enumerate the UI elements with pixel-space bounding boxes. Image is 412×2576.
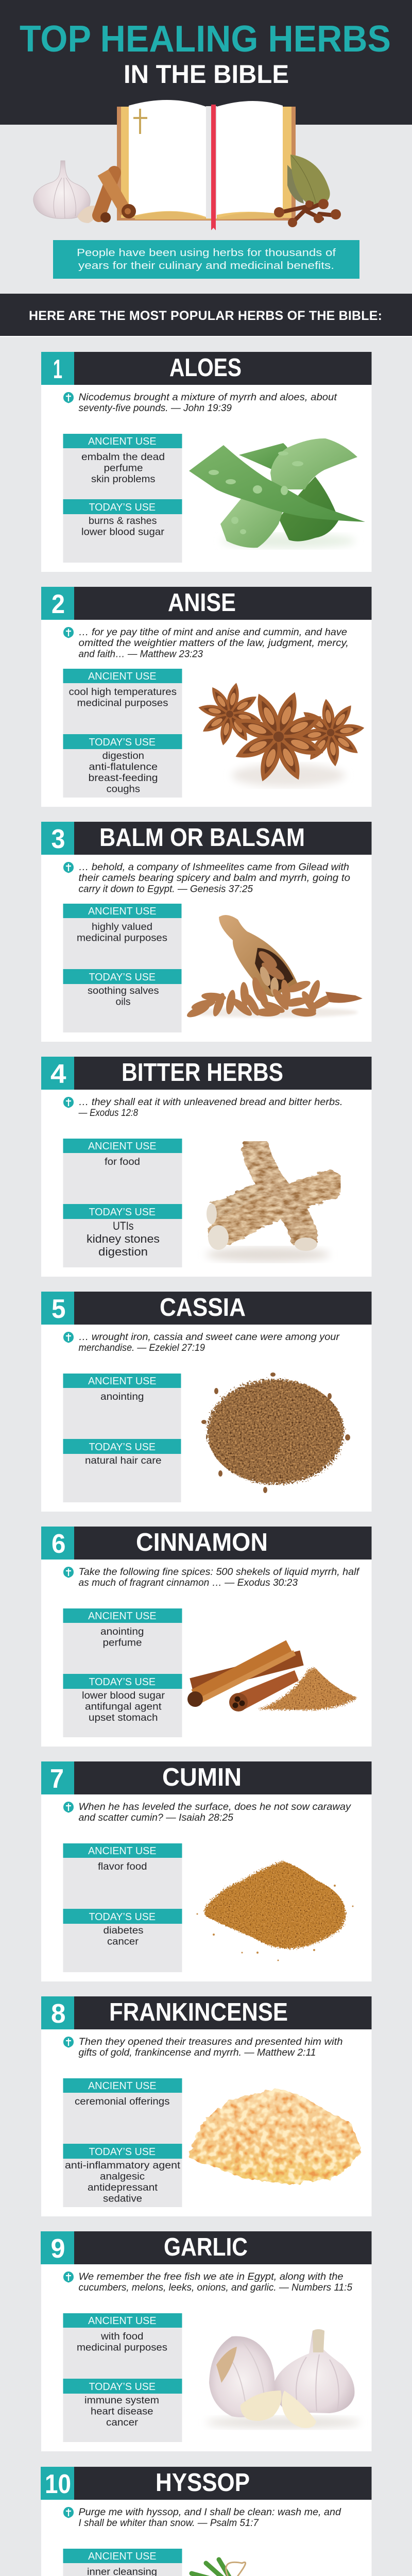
panel: 3 balm or balsam bbox=[41, 822, 372, 1042]
ancient use: ANCIENT USE bbox=[88, 2080, 157, 2092]
bible quote: Purge me with hyssop, and I shall be clean: wash me, and bbox=[78, 2507, 341, 2518]
ancient use bbox=[63, 1139, 182, 1204]
today's use bbox=[63, 969, 181, 1032]
panel: 9 garlic bbox=[41, 2231, 372, 2451]
illustration: open bible bbox=[117, 100, 296, 230]
subtitle: IN THE BIBLE bbox=[124, 60, 289, 89]
heading: BALM OR BALSAM bbox=[99, 824, 305, 852]
today's use: anti-flatulence bbox=[89, 761, 158, 773]
heading: HYSSOP bbox=[156, 2469, 250, 2497]
today's use: diabetes bbox=[103, 1925, 143, 1936]
heading: CUMIN bbox=[162, 1764, 242, 1791]
number: 6 bbox=[52, 1529, 66, 1559]
ancient use: medicinal purposes bbox=[77, 933, 167, 944]
ancient use: perfume bbox=[104, 463, 143, 474]
bible quote bbox=[78, 1802, 352, 1823]
today's use bbox=[63, 2379, 182, 2442]
number: 10 bbox=[45, 2469, 71, 2499]
ancient use: ANCIENT USE bbox=[88, 436, 157, 447]
panel: 1 aloes bbox=[41, 352, 372, 572]
heading: ALOES bbox=[169, 354, 242, 382]
illustration: bay leaves bbox=[287, 155, 330, 207]
bible quote bbox=[78, 1567, 360, 1588]
today's use bbox=[63, 499, 182, 563]
ancient use: anointing bbox=[100, 1626, 144, 1637]
ancient use: ANCIENT USE bbox=[88, 1611, 157, 1622]
ancient use: for food bbox=[105, 1157, 140, 1167]
bible quote bbox=[78, 627, 349, 659]
heading: GARLIC bbox=[164, 2233, 248, 2261]
bible quote: Take the following fine spices: 500 shekels of liquid myrrh, half bbox=[78, 1567, 360, 1578]
today's use: soothing salves bbox=[88, 986, 159, 996]
bible quote: Nicodemus brought a mixture of myrrh and aloes, about bbox=[78, 392, 337, 403]
bible quote: seventy-five pounds. — John 19:39 bbox=[78, 403, 232, 414]
ancient use bbox=[63, 434, 182, 499]
bible quote: carry it down to Egypt. — Genesis 37:25 bbox=[78, 884, 253, 894]
icon: cross bbox=[63, 1802, 74, 1812]
number: 7 bbox=[50, 1764, 64, 1794]
today's use: antidepressant bbox=[88, 2182, 158, 2193]
ancient use: ANCIENT USE bbox=[88, 2315, 157, 2327]
today's use: cancer bbox=[107, 1936, 139, 1947]
panel: 5 cassia bbox=[41, 1292, 372, 1512]
panel: 10 hyssop bbox=[41, 2467, 372, 2576]
ancient use: cool high temperatures bbox=[69, 687, 177, 698]
panel: 7 cumin bbox=[41, 1761, 372, 1981]
icon: cross bbox=[63, 2272, 74, 2282]
ancient use: ANCIENT USE bbox=[88, 2551, 157, 2562]
bible quote: — Exodus 12:8 bbox=[78, 1108, 138, 1118]
ancient use bbox=[63, 1843, 182, 1909]
today's use: kidney stones bbox=[87, 1232, 160, 1245]
image: star anise bbox=[192, 676, 369, 798]
illustration: garlic bulb bbox=[33, 161, 98, 223]
ancient use: perfume bbox=[103, 1637, 142, 1649]
today's use: TODAY’S USE bbox=[89, 972, 156, 983]
ancient use bbox=[63, 2313, 182, 2379]
today's use bbox=[63, 1674, 182, 1737]
bible quote: … they shall eat it with unleavened bread and bitter herbs. bbox=[78, 1097, 343, 1108]
today's use: oils bbox=[115, 996, 131, 1008]
today's use: TODAY’S USE bbox=[89, 737, 156, 748]
bible quote bbox=[78, 2037, 343, 2058]
image: cinnamon sticks and powder bbox=[187, 1647, 357, 1711]
ancient use: with food bbox=[100, 2331, 143, 2342]
panel: 6 cinnamon bbox=[41, 1527, 372, 1747]
heading: BITTER HERBS bbox=[122, 1059, 283, 1087]
intro callout bbox=[53, 240, 359, 279]
heading: ANISE bbox=[168, 589, 236, 617]
image: frankincense resin bbox=[190, 2089, 362, 2184]
ancient use: ANCIENT USE bbox=[88, 1376, 157, 1387]
today's use: lower blood sugar bbox=[81, 527, 165, 538]
bible quote bbox=[78, 392, 337, 414]
number: 2 bbox=[52, 589, 65, 619]
illustration: cinnamon sticks bbox=[99, 173, 136, 223]
icon: cross bbox=[63, 862, 74, 873]
today's use: breast-feeding bbox=[89, 773, 158, 784]
bible quote bbox=[78, 2507, 341, 2529]
number: 5 bbox=[52, 1294, 66, 1324]
panel: 4 bitter herbs bbox=[41, 1057, 372, 1277]
today's use: immune system bbox=[84, 2395, 159, 2406]
bible quote: and faith… — Matthew 23:23 bbox=[78, 649, 203, 659]
bible quote: cucumbers, melons, leeks, onions, and garlic. — Numbers 11:5 bbox=[78, 2282, 352, 2293]
today's use: upset stomach bbox=[89, 1713, 158, 1723]
ancient use: ANCIENT USE bbox=[88, 671, 157, 682]
today's use: UTIs bbox=[113, 1219, 134, 1232]
today's use: TODAY’S USE bbox=[89, 1676, 156, 1688]
section heading band bbox=[0, 294, 412, 337]
bible quote: … behold, a company of Ishmeelites came from Gilead with bbox=[78, 862, 349, 873]
ancient use: ANCIENT USE bbox=[88, 1845, 157, 1857]
today's use bbox=[63, 1439, 181, 1502]
ancient use: ceremonial offerings bbox=[75, 2096, 170, 2107]
ancient use: medicinal purposes bbox=[77, 2342, 167, 2353]
number: 9 bbox=[50, 2234, 65, 2264]
image: hyssop bundle bbox=[183, 2560, 363, 2576]
today's use: analgesic bbox=[100, 2171, 145, 2182]
bible quote: When he has leveled the surface, does he not sow caraway bbox=[78, 1802, 352, 1812]
today's use: sedative bbox=[103, 2194, 142, 2204]
ancient use: highly valued bbox=[92, 922, 152, 933]
heading: CINNAMON bbox=[136, 1529, 268, 1556]
bible quote: We remember the free fish we ate in Egypt, along with the bbox=[78, 2272, 343, 2282]
today's use: TODAY’S USE bbox=[89, 1911, 156, 1923]
bible quote: … wrought iron, cassia and sweet cane were among your bbox=[78, 1332, 340, 1343]
icon: cross bbox=[63, 627, 74, 638]
image: garlic bulbs and cloves bbox=[206, 2329, 360, 2429]
number: 3 bbox=[52, 824, 65, 854]
bible quote bbox=[78, 2272, 352, 2293]
bible quote: and scatter cumin? — Isaiah 28:25 bbox=[78, 1812, 233, 1823]
icon: cross bbox=[63, 1332, 74, 1343]
icon: cross bbox=[63, 1097, 74, 1108]
today's use: TODAY’S USE bbox=[89, 2381, 156, 2393]
bible quote bbox=[78, 1097, 342, 1118]
today's use: digestion bbox=[98, 1245, 148, 1258]
number: 4 bbox=[50, 1059, 66, 1089]
ancient use: ANCIENT USE bbox=[88, 906, 157, 917]
ancient use bbox=[63, 904, 181, 969]
ancient use bbox=[63, 1374, 181, 1439]
today's use: TODAY’S USE bbox=[89, 2146, 156, 2158]
heading: FRANKINCENSE bbox=[109, 1998, 288, 2026]
intro callout: People have been using herbs for thousands of bbox=[77, 247, 336, 259]
today's use: TODAY’S USE bbox=[89, 502, 156, 513]
heading: CASSIA bbox=[160, 1294, 246, 1321]
image: ground cumin bbox=[197, 1861, 353, 1961]
image: bitter herb roots bbox=[206, 1150, 330, 1262]
image: cassia seeds bbox=[201, 1372, 350, 1493]
bible quote: omitted the weightier matters of the law, judgment, mercy, bbox=[78, 638, 349, 649]
title: TOP HEALING HERBS bbox=[20, 19, 391, 60]
icon: cross bbox=[63, 1567, 74, 1578]
section heading band: HERE ARE THE MOST POPULAR HERBS OF THE BIBLE: bbox=[29, 309, 382, 323]
bible quote: gifts of gold, frankincense and myrrh. — Matthew 2:11 bbox=[78, 2047, 316, 2058]
today's use: cancer bbox=[106, 2417, 139, 2428]
number: 1 bbox=[53, 354, 62, 384]
today's use: antifungal agent bbox=[85, 1701, 162, 1713]
ancient use: ANCIENT USE bbox=[88, 1141, 157, 1152]
ancient use: flavor food bbox=[98, 1861, 147, 1872]
icon: cross bbox=[63, 2507, 74, 2518]
image: aloe leaves bbox=[189, 438, 365, 548]
today's use bbox=[63, 1204, 182, 1267]
header panel bbox=[0, 0, 412, 294]
today's use: natural hair care bbox=[85, 1455, 162, 1466]
ancient use: anointing bbox=[100, 1392, 144, 1402]
bible quote: Then they opened their treasures and presented him with bbox=[78, 2037, 343, 2047]
icon: cross bbox=[63, 392, 74, 403]
today's use: anti-inflammatory agent bbox=[65, 2160, 181, 2171]
ancient use: skin problems bbox=[91, 474, 156, 485]
ancient use bbox=[63, 2078, 182, 2144]
bible quote: their camels bearing spicery and balm and myrrh, going to bbox=[78, 873, 350, 884]
image: balm seeds in scoop bbox=[185, 915, 363, 1020]
ancient use: medicinal purposes bbox=[77, 698, 168, 709]
today's use: burns & rashes bbox=[89, 516, 157, 527]
bible quote bbox=[78, 862, 350, 894]
today's use: digestion bbox=[102, 751, 144, 761]
today's use bbox=[63, 734, 182, 798]
bible quote: as much of fragrant cinnamon … — Exodus 30:23 bbox=[78, 1578, 298, 1588]
ancient use: embalm the dead bbox=[81, 452, 165, 463]
number: 8 bbox=[51, 1999, 66, 2029]
bible quote: merchandise. — Ezekiel 27:19 bbox=[78, 1343, 205, 1353]
bible quote bbox=[78, 1332, 340, 1353]
today's use bbox=[63, 2144, 182, 2207]
icon: cross bbox=[63, 2037, 74, 2047]
today's use: lower blood sugar bbox=[82, 1690, 165, 1701]
ancient use bbox=[63, 2549, 182, 2576]
panel: 8 frankincense bbox=[41, 1996, 372, 2216]
panel: 2 anise bbox=[41, 587, 372, 807]
illustration: cloves bbox=[274, 199, 341, 227]
ancient use bbox=[63, 1608, 182, 1674]
today's use: heart disease bbox=[91, 2406, 153, 2417]
intro callout: years for their culinary and medicinal benefits. bbox=[78, 260, 334, 272]
today's use: TODAY’S USE bbox=[89, 1442, 156, 1453]
ancient use bbox=[63, 669, 182, 734]
today's use: coughs bbox=[106, 784, 140, 794]
bible quote: … for ye pay tithe of mint and anise and cummin, and have bbox=[78, 627, 347, 638]
today's use bbox=[63, 1909, 182, 1972]
bible quote: I shall be whiter than snow. — Psalm 51:7 bbox=[78, 2518, 259, 2529]
today's use: TODAY’S USE bbox=[89, 1207, 156, 1218]
